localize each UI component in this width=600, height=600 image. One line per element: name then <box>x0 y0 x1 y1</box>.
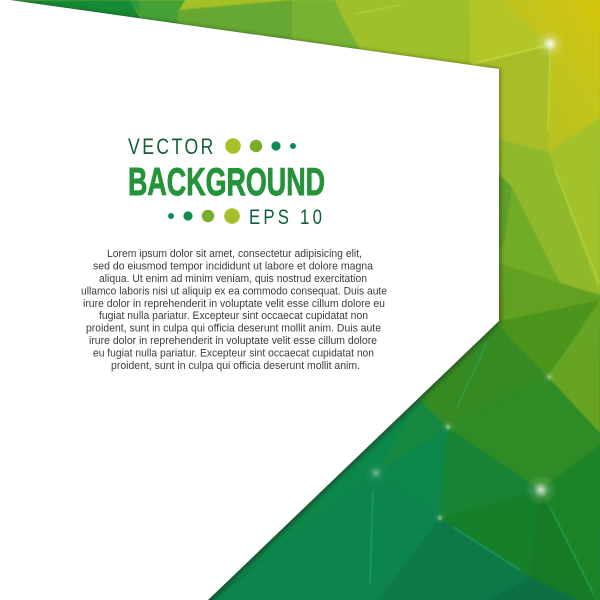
body text: aliqua. Ut enim ad minim veniam, quis nostrud exercitation <box>99 273 367 285</box>
body text: irure dolor in reprehenderit in voluptate velit esse cillum dolore eu <box>83 298 385 310</box>
body text: Lorem ipsum dolor sit amet, consectetur adipisicing elit, <box>107 248 362 260</box>
heading: EPS 10: EPS 10 <box>249 206 325 230</box>
heading: BACKGROUND: BACKGROUND <box>128 161 325 204</box>
body text: eu fugiat nulla pariatur. Excepteur sint occaecat cupidatat non <box>93 348 374 360</box>
heading: VECTOR: VECTOR <box>128 135 216 160</box>
facets: lower green <box>200 300 600 600</box>
body text: proident, sunt in culpa qui officia deserunt mollit anim. Duis aute <box>86 323 381 335</box>
body text: ullamco laboris nisi ut aliquip ex ea commodo consequat. Duis aute <box>81 285 387 297</box>
facets: yellow corner <box>465 0 600 152</box>
body text: irure dolor in reprehenderit in voluptate velit esse cillum dolore <box>89 335 377 347</box>
body text: sed do eiusmod tempor incididunt ut labore et dolore magna <box>93 260 374 272</box>
background: glowing stars <box>365 29 565 524</box>
background: light rays <box>355 5 600 593</box>
body text <box>81 248 387 372</box>
facets: top band <box>0 0 550 66</box>
body text: proident, sunt in culpa qui officia deserunt mollit anim. <box>111 360 360 372</box>
dots row: top <box>225 138 296 154</box>
body text: fugiat nulla pariatur. Excepteur sint occaecat cupidatat non <box>99 310 368 322</box>
facets: right lime <box>495 118 600 325</box>
dots row: bottom <box>168 208 240 224</box>
